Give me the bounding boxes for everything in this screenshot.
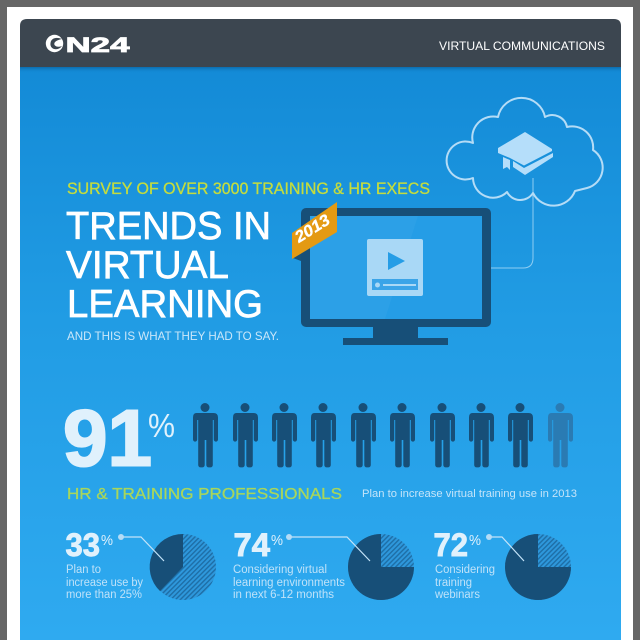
- description: plan to increase: Plan to increase virtual training use in 2013: [362, 488, 577, 500]
- stat: 91%: %: [148, 407, 175, 444]
- pie chart: 72%: [505, 534, 571, 600]
- panel: 72% stat: 72: [434, 527, 468, 563]
- logo: ON24: N24: [66, 33, 130, 57]
- stat: 91%: 91: [63, 394, 152, 482]
- leader line: [121, 537, 164, 561]
- icon: monitor: [301, 208, 491, 345]
- panel: 74% stat: learning environments: [233, 577, 345, 589]
- pie chart: 33%: [150, 534, 216, 600]
- logo: ON24: [46, 33, 130, 57]
- panel: 74% stat: Considering virtual: [233, 564, 327, 576]
- panel: 74% stat: 74: [234, 527, 270, 563]
- title: [66, 205, 271, 326]
- panel: 72% stat: webinars: [434, 589, 480, 601]
- panel: 33% stat: 33: [66, 527, 100, 563]
- icon: cloud with book: [447, 98, 603, 206]
- video player icon: [367, 239, 423, 296]
- panel: 72% stat: training: [435, 577, 472, 589]
- panel: 72% stat: [434, 527, 571, 601]
- panel: 33% stat: %: [101, 532, 113, 549]
- ribbon: 2013: [291, 202, 337, 261]
- icon: book: [498, 132, 553, 175]
- subtitle: AND THIS IS WHAT THEY HAD TO SAY.: [67, 329, 279, 343]
- panel: 33% stat: Plan to: [66, 564, 101, 576]
- ribbon: 2013: 2013: [291, 212, 333, 247]
- panel: 33% stat: more than 25%: [66, 589, 142, 601]
- title: TRENDS IN: [66, 205, 271, 248]
- title: LEARNING: [67, 283, 263, 326]
- panel: 74% stat: [233, 527, 414, 601]
- panel: 33% stat: [66, 527, 216, 601]
- panel: 74% stat: %: [271, 532, 283, 549]
- leader line: [289, 537, 370, 561]
- title: VIRTUAL: [66, 244, 229, 287]
- people row: 9 of 10 highlighted: [193, 403, 573, 467]
- panel: 33% stat: increase use by: [66, 577, 143, 589]
- header bar: [20, 19, 621, 67]
- subheading: HR professionals: HR & TRAINING PROFESSIONALS: [67, 486, 342, 503]
- panel: 72% stat: %: [469, 532, 481, 549]
- survey heading: SURVEY OF OVER 3000 TRAINING & HR EXECS: [67, 180, 430, 198]
- header tagline: VIRTUAL COMMUNICATIONS: [439, 39, 605, 53]
- panel: 72% stat: Considering: [435, 564, 495, 576]
- panel: 74% stat: in next 6-12 months: [233, 589, 334, 601]
- pie chart: 74%: [348, 534, 414, 600]
- connector line: monitor to cloud: [486, 178, 533, 268]
- leader line: [489, 537, 524, 561]
